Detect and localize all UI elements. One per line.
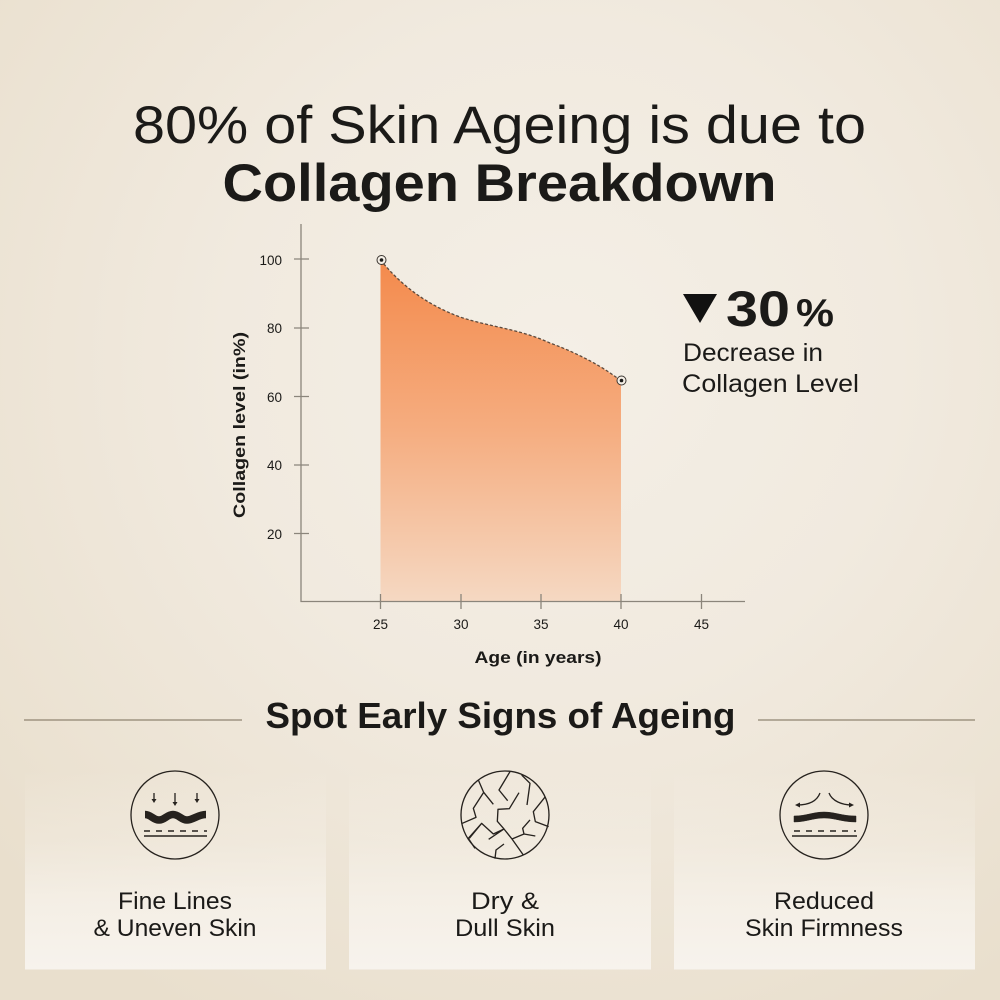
panel: dry skin	[349, 770, 651, 970]
y axis tick labels: 100	[259, 253, 282, 268]
x axis tick labels: 25	[373, 617, 388, 632]
panel: fine lines	[25, 770, 326, 970]
y axis tick labels: 40	[267, 458, 282, 473]
title	[133, 96, 866, 213]
x axis tick labels: 30	[453, 617, 469, 632]
area chart: collagen level by age	[230, 224, 745, 667]
y axis tick labels	[259, 253, 282, 542]
start marker	[377, 256, 386, 264]
icon: down triangle	[683, 294, 717, 323]
x axis tick labels: 35	[533, 617, 549, 632]
callout: 30% decrease: Decrease in	[683, 339, 823, 367]
label: skin firmness	[745, 888, 903, 942]
label: fine lines: Fine Lines	[118, 888, 232, 915]
y axis tick labels: 60	[267, 390, 282, 405]
y axis tick labels: 80	[267, 321, 282, 336]
label: dry skin	[455, 888, 555, 942]
y axis tick labels: 20	[267, 527, 282, 542]
filled collagen area	[380, 260, 621, 601]
label: fine lines	[94, 888, 256, 942]
callout: 30% decrease: 30	[726, 281, 790, 337]
x axis title: Age (in years)	[474, 648, 602, 667]
x axis tick labels	[373, 617, 709, 632]
callout: 30% decrease: Collagen Level	[682, 370, 859, 398]
label: dry skin: Dull Skin	[455, 915, 555, 942]
section heading: Spot Early Signs of Ageing	[266, 695, 736, 736]
label: skin firmness: Reduced	[774, 888, 874, 915]
axes and ticks	[294, 224, 745, 609]
label: dry skin: Dry &	[471, 888, 539, 915]
icon: reduced firmness	[780, 771, 868, 859]
dashed collagen curve	[380, 260, 621, 381]
end marker	[617, 376, 626, 385]
label: fine lines: & Uneven Skin	[94, 915, 256, 942]
title: 80% of Skin Ageing is due to	[133, 96, 866, 155]
label: skin firmness: Skin Firmness	[745, 915, 903, 942]
icon: fine lines	[131, 771, 219, 859]
y axis title: Collagen level (in%)	[230, 332, 249, 518]
callout: 30% decrease: %	[796, 292, 834, 335]
title: Collagen Breakdown	[222, 154, 776, 213]
x axis tick labels: 45	[694, 617, 709, 632]
panel: skin firmness	[674, 770, 975, 970]
callout: 30% decrease	[682, 281, 859, 398]
icon: cracked skin	[461, 771, 549, 859]
x axis tick labels: 40	[613, 617, 629, 632]
